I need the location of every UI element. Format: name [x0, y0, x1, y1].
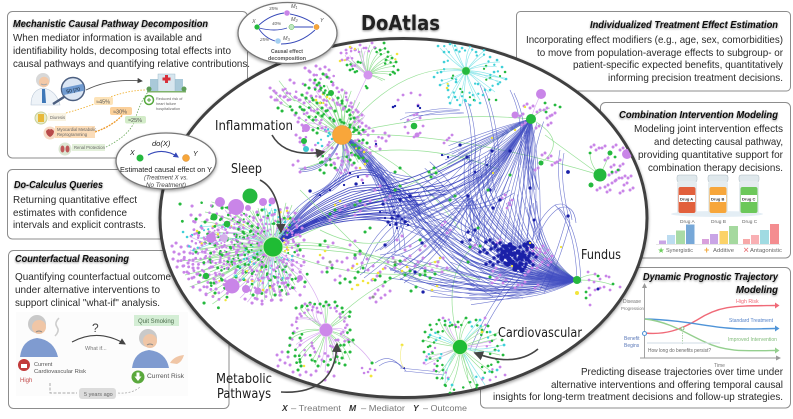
cluster: teal hub: [434, 44, 506, 105]
legend: combination effect types: Antagonistic: [750, 248, 782, 254]
cluster: right upper: [512, 89, 633, 222]
illustration: doctor with magnifier and pathways: ≈25%: [128, 118, 142, 124]
legend: X M Y: – Mediator: [361, 403, 405, 413]
illustration: doctor with magnifier and pathways: ≈45%: [96, 100, 110, 106]
text block: dynamic description: insights for long-term treatment decisions and follow-up strategies.: [493, 391, 783, 403]
callout: causal effect decomposition: 25%: [259, 37, 269, 42]
legend: combination effect types: Synergistic: [666, 248, 693, 254]
text block: mechanistic description: When mediator information is available and: [13, 32, 202, 44]
label: metabolic pathways: [216, 344, 337, 402]
line chart: disease trajectories: High Risk: [736, 299, 759, 305]
illustration: doctor with magnifier and pathways: Reprogramming: [57, 132, 88, 137]
label: sleep: [231, 162, 281, 232]
panel: individualized treatment effect estimation: [516, 12, 790, 91]
text block: counterfactual description: [15, 271, 171, 309]
cluster: sleep: [172, 188, 310, 313]
callout: do(X) estimated causal effect: [116, 133, 216, 189]
illustration: counterfactual smoker scenario: What if...: [85, 346, 107, 352]
cluster: center small: [393, 93, 423, 138]
text block: individualized description: to move from population-average effects to subgroup- or: [537, 47, 783, 59]
inter-cluster edges: [266, 69, 600, 375]
illustration: counterfactual smoker scenario: Quit Smoking: [138, 319, 174, 325]
callout: do(X) estimated causal effect: Y: [193, 151, 199, 158]
illustration: counterfactual smoker scenario: High: [20, 378, 32, 384]
text block: combination description: Modeling joint intervention effects: [634, 123, 783, 135]
text block: mechanistic description: [13, 32, 250, 70]
line chart: disease trajectories: How long do benefits persist?: [648, 348, 711, 354]
text block: do-calculus description: estimates with confidence: [13, 207, 127, 219]
callout: causal effect decomposition: Causal effect: [271, 49, 303, 55]
icon: drug jars: Drug C: [742, 196, 755, 202]
illustration: counterfactual smoker scenario: Cardiovascular Risk: [34, 369, 86, 375]
text block: counterfactual description: Quantifying counterfactual outcome: [15, 271, 171, 283]
icon: drug jars: Drug B: [711, 196, 724, 202]
cluster: fundus: [573, 272, 620, 305]
icon: drug jars: Drug A: [680, 219, 695, 225]
panel: do-calculus queries: [8, 170, 178, 239]
line chart: disease trajectories: Time: [714, 363, 725, 369]
legend: X M Y: – Treatment: [291, 403, 342, 413]
illustration: doctor with magnifier and pathways: Reduced risk of: [156, 97, 183, 101]
text block: counterfactual description: support clinical "what-if" analysis.: [15, 297, 160, 309]
text block: mechanistic description: identifiability holds, decomposing total effects into: [13, 45, 231, 57]
legend: combination effect types: +: [704, 245, 709, 255]
label: metabolic pathways: Metabolic: [216, 372, 272, 387]
legend: combination effect types: ★: [658, 246, 665, 255]
illustration: doctor with magnifier and pathways: Renal Protection: [74, 145, 106, 150]
panel: dynamic prognostic trajectory modeling: [480, 268, 790, 408]
network graph: [172, 43, 633, 396]
label: inflammation: Inflammation: [215, 119, 293, 134]
line chart: disease trajectories: Disease: [623, 299, 641, 305]
text block: counterfactual description: under alternative interventions to: [15, 284, 160, 296]
illustration: doctor with magnifier and pathways: heart failure: [156, 102, 176, 106]
arrow: inflammation: [272, 135, 324, 153]
icon: drug jars: Drug B: [711, 219, 726, 225]
text block: do-calculus description: [13, 194, 146, 231]
cluster: dense blue nodes: [310, 106, 568, 292]
callout: do(X) estimated causal effect: (Treatment X vs.: [144, 176, 188, 182]
legend: X M Y: X: [281, 403, 289, 413]
line chart: disease trajectories: Improved Intervention: [728, 337, 777, 343]
heading: do-calculus: Do-Calculus Queries: [14, 179, 103, 191]
line chart: disease trajectories: Standard Treatment: [729, 318, 774, 324]
heading: combination: Combination Intervention Modeling: [619, 109, 779, 121]
callout: causal effect decomposition: M₃: [283, 36, 291, 42]
heading: counterfactual: Counterfactual Reasoning: [15, 253, 130, 265]
callout: causal effect decomposition: X: [251, 19, 256, 25]
legend: combination effect types: [658, 245, 782, 255]
icon: drug jars: Drug A: [680, 196, 693, 202]
legend: X M Y: M: [349, 403, 357, 413]
callout: causal effect decomposition: Y: [320, 18, 324, 24]
callout: causal effect decomposition: decomposition: [268, 56, 306, 62]
text block: individualized description: [526, 34, 784, 84]
callout: causal effect decomposition: M₂: [291, 17, 299, 23]
text block: mechanistic description: causal pathways and quantifying relative contributions.: [13, 58, 250, 70]
heading: mechanistic: Mechanistic Causal Pathway Decomposition: [13, 18, 208, 30]
callout: do(X) estimated causal effect: X: [129, 150, 135, 157]
text block: combination description: [634, 123, 783, 174]
text block: do-calculus description: intervals and explicit contrasts.: [13, 219, 146, 231]
legend: X M Y: [281, 403, 467, 413]
illustration: doctor with magnifier and pathways: Diuresis: [50, 115, 65, 120]
illustration: counterfactual smoker scenario: ?: [92, 321, 99, 335]
arrow: cardiovascular: [475, 349, 538, 360]
label: sleep: Sleep: [231, 162, 262, 177]
bar chart: combination effects: [656, 224, 780, 244]
label: inflammation: [215, 119, 324, 153]
legend: combination effect types: ✕: [743, 246, 749, 254]
line chart: disease trajectories: Benefit: [624, 336, 640, 342]
illustration: counterfactual smoker scenario: [16, 312, 188, 399]
heading: dynamic: Modeling: [736, 284, 779, 296]
text block: do-calculus description: Returning quantitative effect: [13, 194, 137, 206]
illustration: counterfactual smoker scenario: 5 years ago: [84, 392, 113, 398]
cluster: purple hub: [340, 43, 398, 89]
text block: dynamic description: Predicting disease trajectories over time under: [581, 366, 783, 378]
label: cardiovascular: Cardiovascular: [498, 326, 583, 341]
cluster: metabolic pathways: [277, 301, 404, 380]
callout: causal effect decomposition: M₁: [291, 4, 298, 10]
text block: combination description: combination therapy decisions.: [648, 162, 783, 174]
line chart: disease trajectories: [621, 283, 781, 369]
illustration: counterfactual smoker scenario: Current: [34, 362, 53, 368]
title: DoAtlas: [361, 11, 440, 35]
illustration: doctor with magnifier and pathways: Myocardial Metabolic: [57, 127, 96, 132]
panel: mechanistic causal pathway decomposition: [8, 12, 250, 158]
cluster: middle band: [293, 161, 455, 302]
heading: dynamic: [643, 271, 779, 296]
label: fundus: Fundus: [581, 248, 621, 263]
callout: do(X) estimated causal effect: No Treatment): [146, 183, 186, 189]
callout: causal effect decomposition: [238, 2, 337, 64]
label: cardiovascular: [475, 326, 583, 360]
panel: counterfactual reasoning: [8, 250, 229, 408]
text block: dynamic description: [493, 366, 783, 403]
icon: drug jars: Drug C: [742, 219, 758, 225]
callout: do(X) estimated causal effect: do(X): [152, 139, 171, 148]
panel: combination intervention modeling: [600, 102, 790, 258]
legend: X M Y: – Outcome: [423, 403, 467, 413]
text block: combination description: providing quantitative support for: [638, 149, 783, 161]
arrow: sleep: [260, 180, 281, 232]
main network ellipse: [160, 38, 647, 398]
callout: causal effect decomposition: 35%: [269, 6, 278, 11]
icon: drug jars: [671, 175, 763, 225]
line chart: disease trajectories: Progression: [621, 306, 645, 311]
legend: X M Y: Y: [413, 403, 420, 413]
cluster: cardiovascular: [422, 317, 505, 396]
illustration: doctor with magnifier and pathways: hospitalization: [156, 107, 180, 111]
arrow: metabolic: [281, 344, 337, 392]
text block: dynamic description: alternative interventions and offering temporal causal: [551, 379, 783, 391]
text block: individualized description: informing precision treatment decisions.: [608, 72, 783, 84]
illustration: counterfactual smoker scenario: Current Risk: [147, 374, 185, 380]
text block: combination description: and detecting causal pathway,: [654, 136, 783, 148]
callout: do(X) estimated causal effect: Estimated causal effect on Y: [120, 165, 212, 174]
cluster: inflammation: [269, 66, 389, 173]
illustration: doctor with magnifier and pathways: 50 |70: [66, 87, 81, 95]
illustration: doctor with magnifier and pathways: [31, 73, 186, 156]
callout: causal effect decomposition: 40%: [272, 21, 281, 26]
label: metabolic pathways: Pathways: [217, 387, 271, 402]
legend: combination effect types: Additive: [713, 248, 734, 254]
illustration: doctor with magnifier and pathways: ≈30%: [113, 110, 127, 116]
line chart: disease trajectories: Begins: [624, 343, 640, 349]
text block: individualized description: patient-specific expected benefits, quantitatively: [573, 59, 784, 71]
